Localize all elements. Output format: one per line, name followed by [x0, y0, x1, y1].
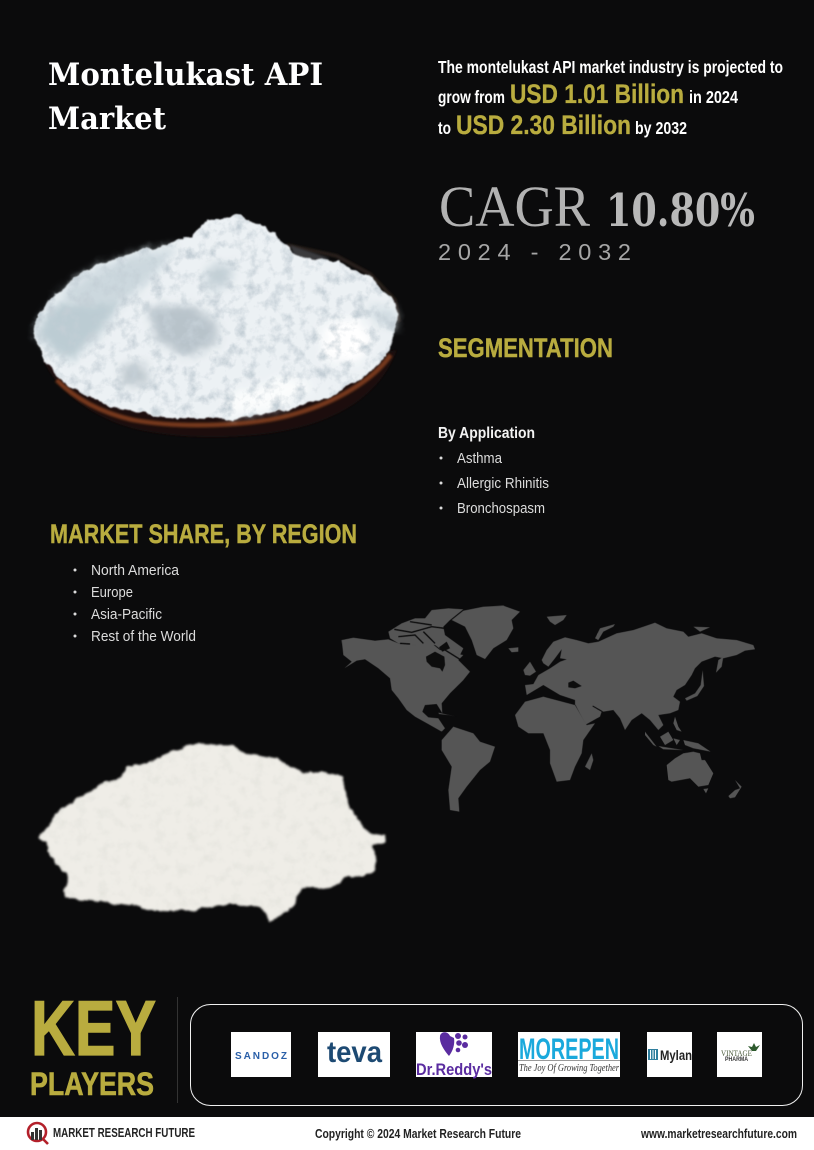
CAGR figure: CAGR — [439, 174, 590, 239]
powder in bowl image — [33, 215, 399, 437]
segmentation list: by application: Allergic Rhinitis — [457, 476, 549, 492]
logo: Morepen: MOREPEN — [519, 1033, 619, 1066]
logo: Morepen — [518, 1032, 620, 1077]
market projection text: USD 2.30 Billion — [456, 110, 631, 140]
logo: Mylan — [647, 1032, 692, 1077]
logo: Vintage Pharma: PHARMA — [725, 1056, 748, 1063]
segmentation list: by application — [438, 425, 549, 517]
region list: North America — [91, 563, 180, 579]
footer: Copyright © 2024 Market Research Future — [315, 1127, 521, 1141]
market projection text — [438, 57, 783, 140]
key players panel — [190, 1004, 802, 1106]
segmentation heading: SEGMENTATION — [438, 333, 613, 363]
CAGR figure: 2024 - 2032 — [438, 239, 631, 265]
region list: Rest of the World — [91, 629, 196, 645]
segmentation list: by application: Asthma — [457, 451, 503, 467]
logo: Teva: teva — [327, 1036, 382, 1069]
market projection text: to — [438, 118, 451, 138]
title: Market — [48, 101, 167, 137]
market projection text: USD 1.01 Billion — [510, 79, 684, 109]
logo: Sandoz — [231, 1032, 291, 1077]
CAGR figure: 10.80% — [606, 184, 755, 237]
logo: Morepen: The Joy Of Growing Together — [519, 1063, 619, 1074]
key players heading: PLAYERS — [30, 1066, 154, 1102]
key players heading: KEY — [31, 984, 156, 1072]
market projection text: in 2024 — [689, 87, 738, 107]
world map — [342, 606, 755, 812]
logo: Sandoz: SANDOZ — [235, 1051, 287, 1062]
logo: Dr. Reddy's: Dr.Reddy's — [416, 1060, 492, 1079]
region list: Asia-Pacific — [91, 607, 162, 623]
logo: Teva — [318, 1032, 390, 1077]
title — [48, 57, 323, 137]
powder pile image — [38, 744, 385, 923]
market projection text: by 2032 — [635, 118, 687, 138]
footer — [0, 1117, 814, 1150]
region list — [74, 563, 196, 645]
logo: Vintage Pharma: VINTAGE — [721, 1048, 752, 1058]
key players heading — [30, 984, 156, 1102]
segmentation list: by application: Bronchospasm — [457, 501, 545, 517]
logo: Mylan: Mylan — [660, 1047, 692, 1063]
icon: market research future logo — [28, 1123, 48, 1144]
region list: Europe — [91, 585, 133, 601]
market projection text: grow from — [438, 87, 505, 107]
CAGR figure — [438, 174, 755, 265]
title: Montelukast API — [48, 57, 323, 93]
logo: Vintage Pharma — [717, 1032, 762, 1077]
logo: Dr. Reddy's — [416, 1032, 492, 1079]
divider — [177, 997, 178, 1103]
market share heading: MARKET SHARE, BY REGION — [50, 519, 357, 549]
segmentation list: by application: By Application — [438, 425, 535, 442]
footer: MARKET RESEARCH FUTURE — [53, 1125, 195, 1140]
